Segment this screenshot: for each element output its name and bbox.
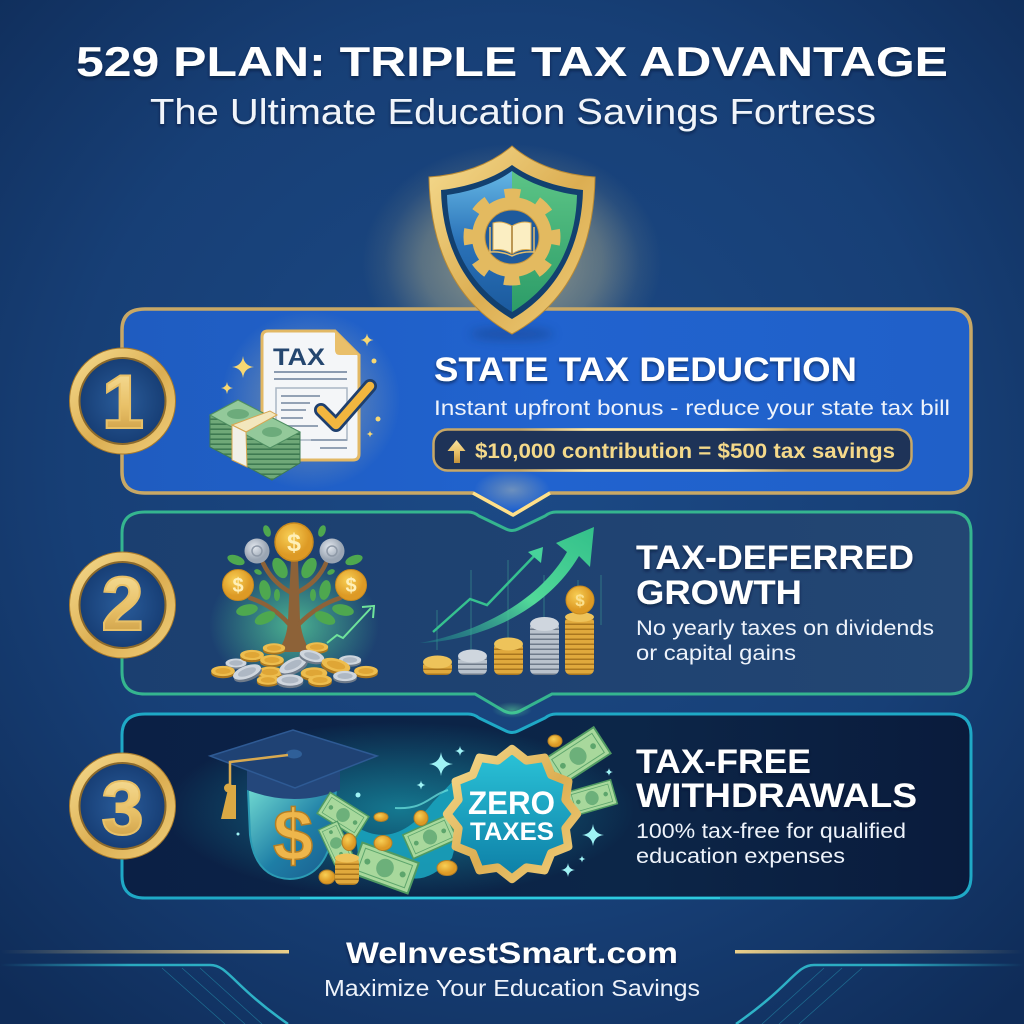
icon: money tree: $ [345, 575, 357, 597]
teal wave [355, 778, 470, 879]
description: tax-free expenses: education expenses [636, 845, 845, 868]
coin pile [263, 643, 285, 655]
heading: state tax deduction: STATE TAX DEDUCTION [434, 351, 857, 389]
icon: shield with gear and book [429, 146, 595, 334]
notch glow [474, 470, 550, 510]
number badge 2: 2 [101, 562, 144, 647]
chart: coin stacks with growth arrow: $ [575, 591, 585, 610]
panel 3: tax-free withdrawals [122, 714, 971, 898]
badge: zero taxes: TAXES [470, 818, 554, 846]
icon: up arrow [448, 440, 466, 463]
book [493, 222, 531, 254]
heading: tax-deferred growth: GROWTH [636, 574, 802, 612]
paper band [232, 411, 277, 432]
checkmark [321, 386, 370, 425]
icon: money tree: $ [232, 575, 244, 597]
description: upfront bonus: Instant upfront bonus - reduce your state tax bill [434, 397, 950, 420]
chart: coin stacks with growth arrow [420, 527, 601, 675]
heading: tax-free withdrawals: WITHDRAWALS [636, 777, 917, 815]
footer website: WeInvestSmart.com [346, 937, 678, 970]
footer lines right [735, 950, 1024, 1024]
glass pouch [248, 790, 336, 879]
sparkles [232, 356, 254, 378]
panel 1: state tax deduction [122, 308, 971, 515]
top glow line [200, 305, 860, 311]
icon: graduation cap with money flow [210, 727, 617, 894]
description: no yearly taxes [636, 617, 934, 665]
number badge 2 [70, 552, 176, 658]
thin arrow [433, 553, 537, 632]
description: tax-free expenses: 100% tax-free for qualified [636, 820, 906, 843]
gear [470, 195, 554, 279]
heading: tax-free withdrawals: TAX-FREE [636, 743, 811, 781]
main arrow [420, 527, 594, 643]
title: 529 PLAN: TRIPLE TAX ADVANTAGE [76, 38, 948, 85]
description: no yearly taxes: or capital gains [636, 642, 796, 665]
icon: tax document with money: TAX [273, 344, 325, 371]
badge: zero taxes [447, 749, 577, 879]
heading: tax-free withdrawals [636, 743, 917, 815]
panel 2: tax-deferred growth [122, 512, 971, 718]
icon: money tree: $ [287, 529, 301, 557]
icon: tax document with money [210, 310, 400, 490]
money stack [210, 400, 300, 480]
bills behind badge [545, 727, 611, 785]
subtitle: The Ultimate Education Savings Fortress [150, 91, 876, 132]
number badge 1 [70, 348, 176, 454]
number badge 3: 3 [101, 766, 144, 851]
number badge 3 [70, 753, 176, 859]
callout: contribution savings [434, 430, 912, 470]
icon: graduation cap with money flow: $ [273, 796, 313, 876]
badge: zero taxes: ZERO [468, 785, 555, 821]
cap [247, 770, 340, 799]
coins on branches [275, 523, 313, 561]
description: tax-free expenses [636, 820, 906, 868]
small growth arrow [327, 606, 374, 643]
number badge 1: 1 [102, 360, 144, 445]
heading: tax-deferred growth [636, 539, 914, 612]
icon: money tree [209, 523, 379, 693]
sparkles [429, 752, 453, 776]
description: no yearly taxes: No yearly taxes on dividends [636, 617, 934, 640]
callout: contribution savings: $10,000 contribution = $500 tax savings [475, 440, 895, 463]
shadow beneath shield [470, 327, 554, 341]
heading: tax-deferred growth: TAX-DEFERRED [636, 539, 914, 577]
shield glow [362, 144, 662, 380]
bills and coins [317, 792, 369, 838]
footer lines left [0, 950, 289, 1024]
footer tagline: Maximize Your Education Savings [324, 975, 700, 1001]
stacks [423, 660, 452, 675]
